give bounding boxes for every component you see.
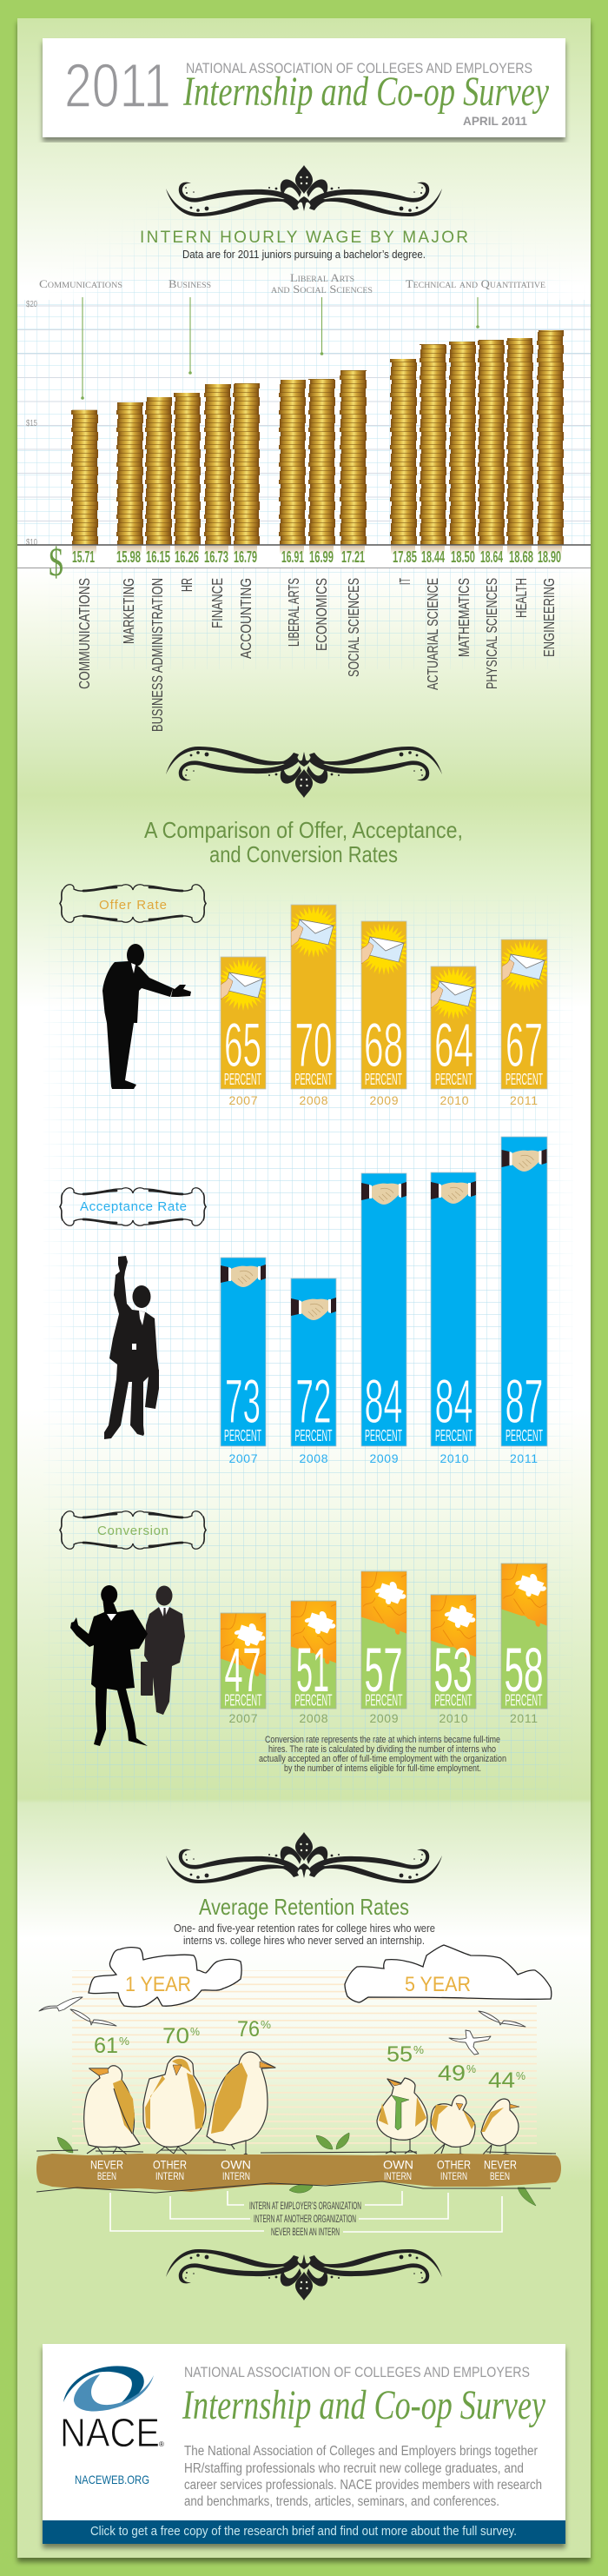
bar 2009: 68	[364, 1012, 403, 1080]
bar 2010: 53	[434, 1637, 473, 1705]
bar 2011: 2011	[510, 1093, 538, 1107]
wage values: 16.79	[234, 548, 257, 566]
ground: INTERN	[155, 2172, 184, 2182]
silhouette: man with briefcase	[141, 1585, 185, 1715]
wage values: 16.91	[281, 548, 304, 566]
major labels: IT	[396, 578, 413, 585]
percent: 5 year never	[488, 2068, 525, 2093]
percent: 5 year own: %	[413, 2043, 424, 2056]
arrow: communications	[81, 297, 84, 400]
bar 2007: PERCENT	[224, 1691, 262, 1709]
arrow: technical	[476, 297, 479, 329]
wage values: 17.21	[341, 548, 365, 566]
bar 2007: 2007	[229, 1711, 258, 1725]
bar 2009: 2009	[370, 1093, 399, 1107]
bar 2010	[423, 963, 484, 1107]
percent: 5 year other: 49	[438, 2061, 466, 2086]
section title: comparison: A Comparison of Offer, Acceptance,	[144, 817, 463, 843]
ground: NEVER	[484, 2157, 517, 2171]
birds	[39, 1997, 525, 2055]
cloud: 1 year: 1 YEAR	[125, 1973, 191, 1996]
chart gridlines	[17, 306, 591, 521]
conversion note: by the number of interns eligible for full-time employment.	[284, 1763, 481, 1774]
bar 2011: 87	[506, 1368, 544, 1437]
conversion note: Conversion rate represents the rate at which interns became full-time	[265, 1735, 500, 1745]
section title: wage: INTERN HOURLY WAGE BY MAJOR	[140, 229, 468, 247]
conversion note: actually accepted an offer of full-time employment with the organization	[259, 1754, 506, 1764]
call to action bar: Click to get a free copy of the research brief and find out more about the full survey.	[90, 2524, 517, 2539]
panel: offer rate	[60, 885, 555, 1107]
group label: liberal arts: and Social Sciences	[271, 282, 373, 295]
silhouette: man with raised fist	[104, 1256, 159, 1439]
major labels: MARKETING	[120, 578, 137, 644]
ground: INTERN	[384, 2172, 412, 2182]
wage values: 17.85	[393, 548, 417, 566]
bar 2010: 2010	[439, 1093, 469, 1107]
arrow: liberal arts	[321, 297, 323, 355]
major labels: HEALTH	[512, 578, 530, 618]
wage values: 16.15	[146, 548, 170, 566]
major labels: ENGINEERING	[540, 578, 558, 657]
panel: conversion	[60, 1511, 547, 1774]
silhouette: woman with thumb up	[70, 1585, 148, 1746]
bracket: never been intern: NEVER BEEN AN INTERN	[271, 2226, 340, 2238]
footer description: HR/staffing professionals who recruit new college graduates, and	[184, 2461, 524, 2476]
major labels	[76, 578, 558, 732]
bar 2010: PERCENT	[435, 1427, 473, 1444]
footer description	[184, 2444, 542, 2509]
bar 2007: 47	[224, 1637, 261, 1705]
wage values: 18.50	[451, 548, 475, 566]
bar 2009	[361, 1571, 406, 1725]
logo: NACE: ®	[159, 2440, 164, 2448]
section subtitle: wage: Data are for 2011 juniors pursuing a bachelor’s degree.	[182, 248, 426, 261]
bar 2009: PERCENT	[365, 1071, 402, 1088]
penguin: 5 year other	[431, 2095, 475, 2155]
axis labels	[26, 300, 37, 548]
grid background: comparison rates	[43, 895, 573, 1812]
percent: 1 year own: %	[261, 2018, 271, 2031]
ground: BEEN	[490, 2172, 510, 2182]
bar 2009: PERCENT	[365, 1427, 402, 1444]
group label: communications: Communications	[39, 277, 122, 290]
bar 2011: PERCENT	[506, 1071, 543, 1088]
panel: acceptance rate	[60, 1137, 547, 1465]
major labels: LIBERAL ARTS	[285, 578, 302, 647]
cloud: 5 year: 5 YEAR	[405, 1973, 471, 1996]
frame label: offer rate	[60, 885, 206, 922]
bar 2008: PERCENT	[295, 1691, 332, 1709]
percent: 5 year never: 44	[488, 2068, 515, 2093]
bar 2010: 84	[434, 1368, 473, 1437]
ground: OTHER	[437, 2157, 471, 2171]
ground: INTERN	[440, 2172, 467, 2182]
penguin: 5 year own	[377, 2078, 427, 2154]
bar 2008	[291, 1278, 336, 1465]
ground: BEEN	[97, 2172, 116, 2182]
leaves	[57, 2133, 536, 2206]
frame label: conversion	[60, 1511, 206, 1549]
group label: technical	[406, 277, 546, 329]
bar 2009	[361, 1173, 406, 1465]
major labels: HR	[178, 578, 195, 592]
logo: NACE	[60, 2366, 164, 2455]
wage values: 16.73	[204, 548, 228, 566]
bar 2008: 51	[296, 1637, 329, 1705]
percent: 1 year never: %	[119, 2035, 129, 2048]
major labels: MATHEMATICS	[455, 578, 473, 657]
percent: 5 year never: %	[516, 2069, 525, 2082]
bracket: own employer	[228, 2191, 402, 2212]
group label: liberal arts	[271, 271, 373, 355]
website: NACEWEB.ORG	[75, 2473, 149, 2486]
percent: 1 year never	[94, 2034, 129, 2058]
logo: NACE: NACE	[60, 2410, 160, 2455]
conversion note	[259, 1735, 506, 1774]
bar 2007	[221, 1258, 266, 1465]
bar 2010: PERCENT	[434, 1691, 473, 1709]
wage chart	[17, 300, 591, 732]
bar 2008: 2008	[299, 1451, 328, 1465]
section subtitle: retention: interns vs. college hires who never served an internship.	[183, 1934, 425, 1947]
bar 2011: PERCENT	[506, 1427, 543, 1444]
group label: technical: Technical and Quantitative	[406, 277, 546, 290]
major labels: ECONOMICS	[313, 578, 330, 651]
bracket: another organization	[170, 2193, 448, 2225]
bar 2009: PERCENT	[365, 1691, 403, 1709]
bar 2010: 2010	[439, 1451, 469, 1465]
major labels: FINANCE	[208, 578, 226, 628]
bracket: never been intern	[110, 2193, 502, 2238]
penguin: 1 year own	[207, 2052, 275, 2158]
major labels: ACCOUNTING	[237, 578, 254, 659]
bracket: another organization: INTERN AT ANOTHER ORGANIZATION	[254, 2213, 356, 2225]
bar 2007	[221, 1613, 266, 1725]
percent: 5 year other: %	[466, 2062, 476, 2075]
bar 2008	[291, 1601, 336, 1725]
ornament bottom flipped	[166, 2249, 442, 2300]
bar 2007: 2007	[229, 1093, 258, 1107]
wage values: 16.99	[309, 548, 334, 566]
section title: comparison	[144, 817, 463, 867]
white value band	[17, 545, 591, 568]
bar 2011	[501, 1564, 547, 1725]
footer description: career services professionals. NACE provides members with research	[184, 2478, 542, 2493]
section title: comparison: and Conversion Rates	[209, 841, 398, 867]
ground: INTERN	[222, 2172, 250, 2182]
major labels: PHYSICAL SCIENCES	[483, 578, 500, 689]
wage values: 15.71	[72, 548, 95, 566]
coin stacks	[71, 330, 565, 545]
bar 2009: 2009	[370, 1451, 399, 1465]
wage values: 18.44	[421, 548, 445, 566]
penguin: 1 year other	[143, 2056, 206, 2154]
bar 2011: 2011	[510, 1451, 538, 1465]
bar 2008	[283, 901, 344, 1107]
bar 2007: 73	[225, 1368, 261, 1437]
wage values: 16.26	[175, 548, 199, 566]
wage values: 18.90	[538, 548, 561, 566]
panel: retention illustration	[36, 1945, 561, 2238]
bar 2007: PERCENT	[224, 1427, 261, 1444]
coin reflections	[72, 546, 562, 554]
group label: business	[169, 277, 211, 375]
section subtitle: retention	[174, 1922, 435, 1947]
bar 2011: 67	[506, 1012, 543, 1080]
bar 2007	[213, 954, 274, 1107]
bar 2010	[431, 1172, 476, 1465]
bar 2011	[501, 1137, 547, 1465]
bar 2008: PERCENT	[295, 1071, 332, 1088]
bracket: own employer: INTERN AT EMPLOYER’S ORGANIZATION	[249, 2200, 361, 2212]
ground: OTHER	[153, 2157, 187, 2171]
wage values: 18.64	[480, 548, 503, 566]
percent: 1 year other: 70	[162, 2024, 189, 2048]
major labels: SOCIAL SCIENCES	[345, 578, 362, 677]
frame label: offer rate: Offer Rate	[99, 898, 167, 913]
bar 2009: 57	[365, 1637, 403, 1705]
frame label: conversion: Conversion	[97, 1524, 169, 1538]
bar 2011: PERCENT	[506, 1691, 542, 1709]
bar 2008: 70	[295, 1012, 332, 1080]
percent: 5 year own: 55	[387, 2042, 413, 2067]
grid background: wage chart	[17, 200, 591, 669]
dollar sign: $	[49, 540, 63, 585]
ornament third	[166, 1832, 442, 1883]
bar 2009: 84	[365, 1368, 403, 1437]
header year: 2011	[64, 52, 171, 121]
bar 2011	[494, 936, 555, 1107]
silhouette: man offering	[102, 944, 191, 1089]
percent: 1 year other	[162, 2024, 200, 2048]
frame label: acceptance rate: Acceptance Rate	[80, 1199, 187, 1214]
group label: business: Business	[169, 277, 211, 290]
penguin: 1 year never	[84, 2066, 140, 2154]
axis labels: $15	[26, 419, 37, 428]
bar 2010: 64	[434, 1012, 473, 1080]
major labels: BUSINESS ADMINISTRATION	[149, 578, 166, 732]
bar 2008: 2008	[299, 1093, 328, 1107]
section subtitle: retention: One- and five-year retention rates for college hires who were	[174, 1922, 435, 1935]
header date: APRIL 2011	[463, 114, 527, 128]
axis labels: $20	[26, 300, 37, 309]
wage values: 18.68	[509, 548, 533, 566]
group label: liberal arts: Liberal Arts	[290, 271, 354, 284]
ground labels: NEVER	[90, 2157, 123, 2171]
bar 2008: PERCENT	[295, 1427, 332, 1444]
bar 2007: 2007	[229, 1451, 258, 1465]
ground	[36, 2150, 561, 2193]
header organization: NATIONAL ASSOCIATION OF COLLEGES AND EMPLOYERS	[186, 60, 532, 76]
cloud: 5 year	[345, 1945, 552, 2002]
ornament top	[166, 165, 442, 216]
cloud: 1 year	[89, 1948, 241, 2007]
percent: 1 year other: %	[190, 2025, 200, 2038]
frame label: acceptance rate	[60, 1188, 206, 1225]
bar 2010: PERCENT	[435, 1071, 473, 1088]
conversion note: hires. The rate is calculated by dividing the number of interns who	[268, 1744, 496, 1755]
footer organization: NATIONAL ASSOCIATION OF COLLEGES AND EMPLOYERS	[184, 2364, 530, 2380]
section title: retention: Average Retention Rates	[199, 1894, 409, 1920]
call to action bar	[43, 2520, 565, 2544]
bar 2009: 2009	[370, 1711, 399, 1725]
axis labels: $10	[26, 538, 37, 548]
bar 2008: 72	[295, 1368, 332, 1437]
percent: 5 year other	[438, 2061, 476, 2086]
percent: 5 year own	[387, 2042, 424, 2067]
major labels: COMMUNICATIONS	[76, 578, 93, 689]
footer description: and benchmarks, trends, articles, seminars, and conferences.	[184, 2494, 499, 2509]
ground: OWN	[383, 2157, 413, 2171]
bar 2011: 58	[504, 1637, 544, 1705]
bar 2010	[431, 1595, 476, 1725]
bar 2007: PERCENT	[224, 1071, 261, 1088]
group label: communications	[39, 277, 122, 400]
bar 2009	[354, 919, 414, 1107]
arrow: business	[188, 297, 192, 375]
footer card	[43, 2344, 565, 2544]
bar 2011: 2011	[510, 1711, 538, 1725]
bar 2007: 65	[224, 1012, 261, 1080]
wage values: 15.98	[116, 548, 141, 566]
major labels: ACTUARIAL SCIENCE	[424, 578, 441, 690]
ornament flipped	[166, 747, 442, 798]
percent: 1 year own: 76	[237, 2017, 260, 2042]
bar 2010: 2010	[439, 1711, 468, 1725]
footer description: The National Association of Colleges and Employers brings together	[184, 2444, 538, 2459]
header card	[43, 38, 565, 137]
percent: 1 year never: 61	[94, 2034, 118, 2058]
bar 2008: 2008	[299, 1711, 328, 1725]
ground: OWN	[221, 2157, 251, 2171]
wage values	[72, 548, 561, 566]
penguin: 5 year never	[481, 2099, 519, 2155]
